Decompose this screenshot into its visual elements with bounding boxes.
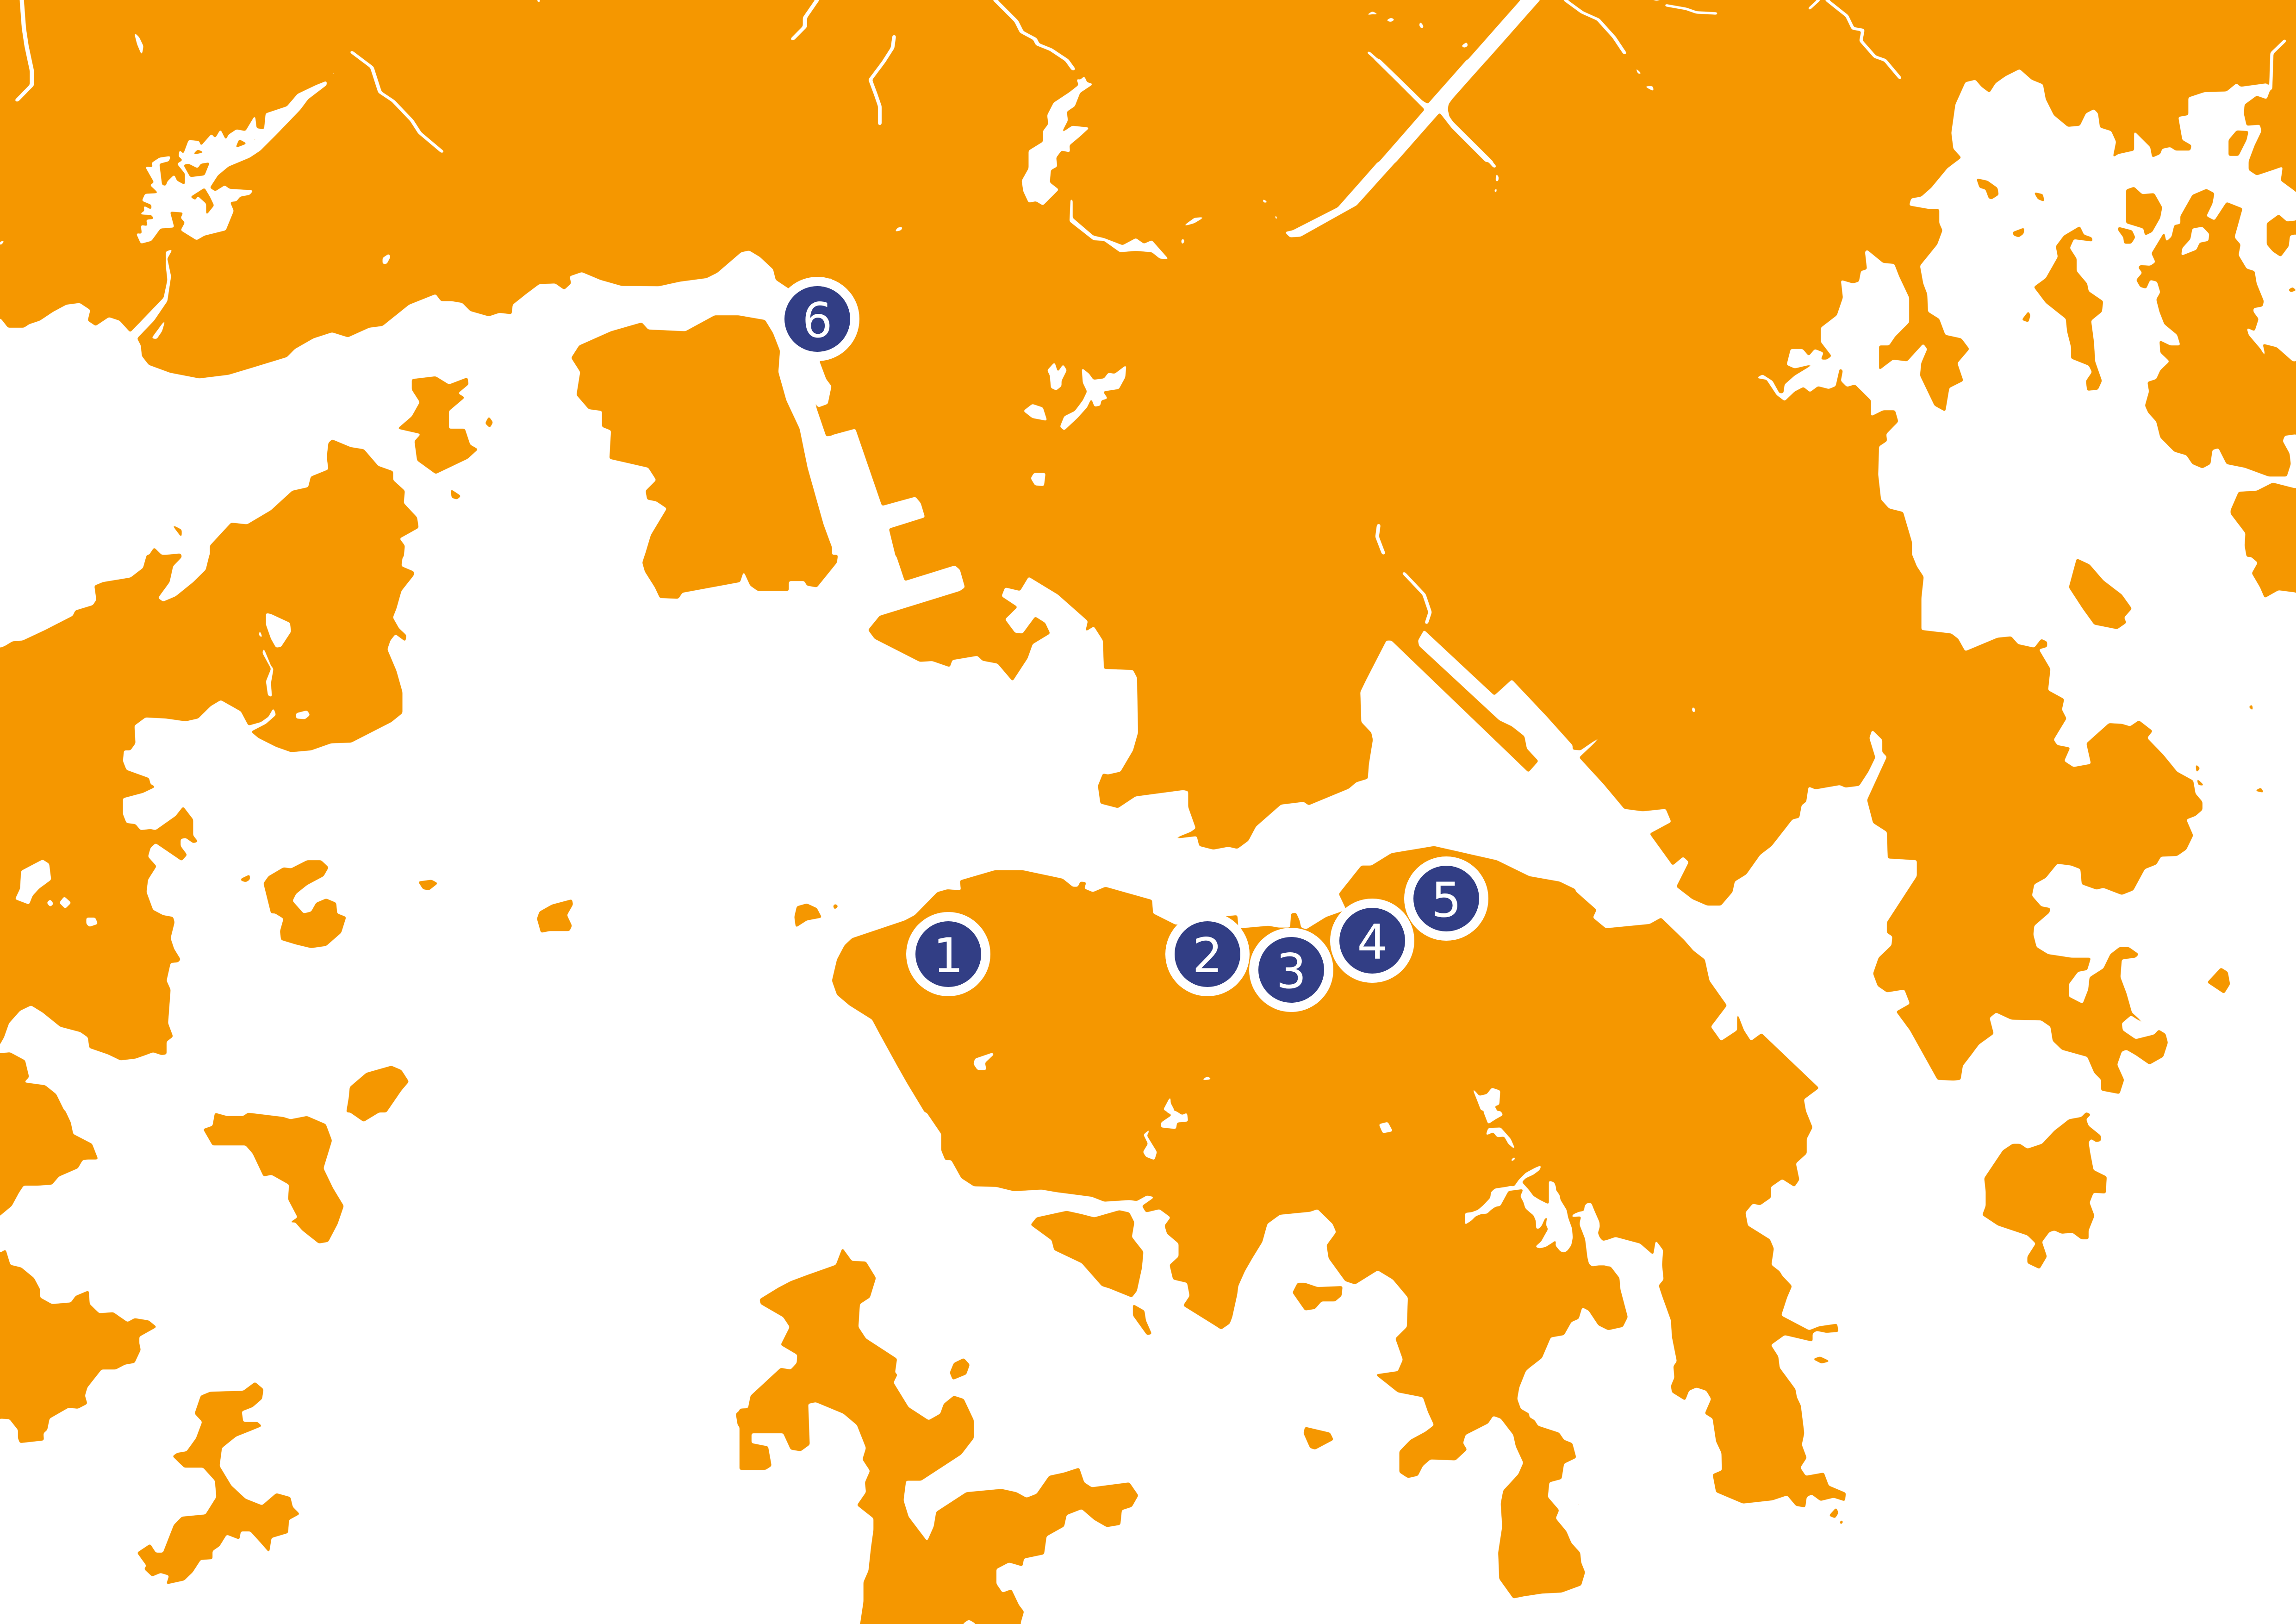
land: Kowloon peninsula and northern Hong Kong Island xyxy=(786,555,1575,1112)
channel crossing north of the airport xyxy=(1338,59,1527,207)
marker 3: 3 xyxy=(1276,944,1307,999)
marker 1: 1 xyxy=(933,928,964,984)
land: Stanley peninsula, Shek O and Tung Lung islet xyxy=(1526,1111,2107,1596)
land: Kowloon north and airport channel area xyxy=(832,0,1667,557)
marker 2 xyxy=(1165,912,1250,996)
marker 4: 4 xyxy=(1357,915,1388,970)
marker 5 xyxy=(1404,856,1488,941)
marker 4 xyxy=(1330,899,1414,983)
land: south-west islands xyxy=(0,1111,742,1584)
marker 3 xyxy=(1249,928,1333,1012)
marker 6 xyxy=(775,277,859,361)
marker 6: 6 xyxy=(802,293,833,349)
land: southern Hong Kong Island, Ap Lei Chau and Lamma xyxy=(740,1111,1529,1624)
land: north-east New Territories and Sai Kung xyxy=(1665,0,2296,557)
inlets: Tai Tam and Stanley bays xyxy=(1458,1163,1607,1270)
marker 5: 5 xyxy=(1431,873,1462,928)
marker 2: 2 xyxy=(1192,928,1223,984)
land: north-west New Territories and Tsing Yi xyxy=(0,0,835,557)
land: western New Territories and Lantau islets xyxy=(0,555,789,1112)
land: east Kowloon, Clear Water Bay and north-east Hong Kong Island xyxy=(1573,555,2296,1112)
marker 1 xyxy=(906,912,990,996)
